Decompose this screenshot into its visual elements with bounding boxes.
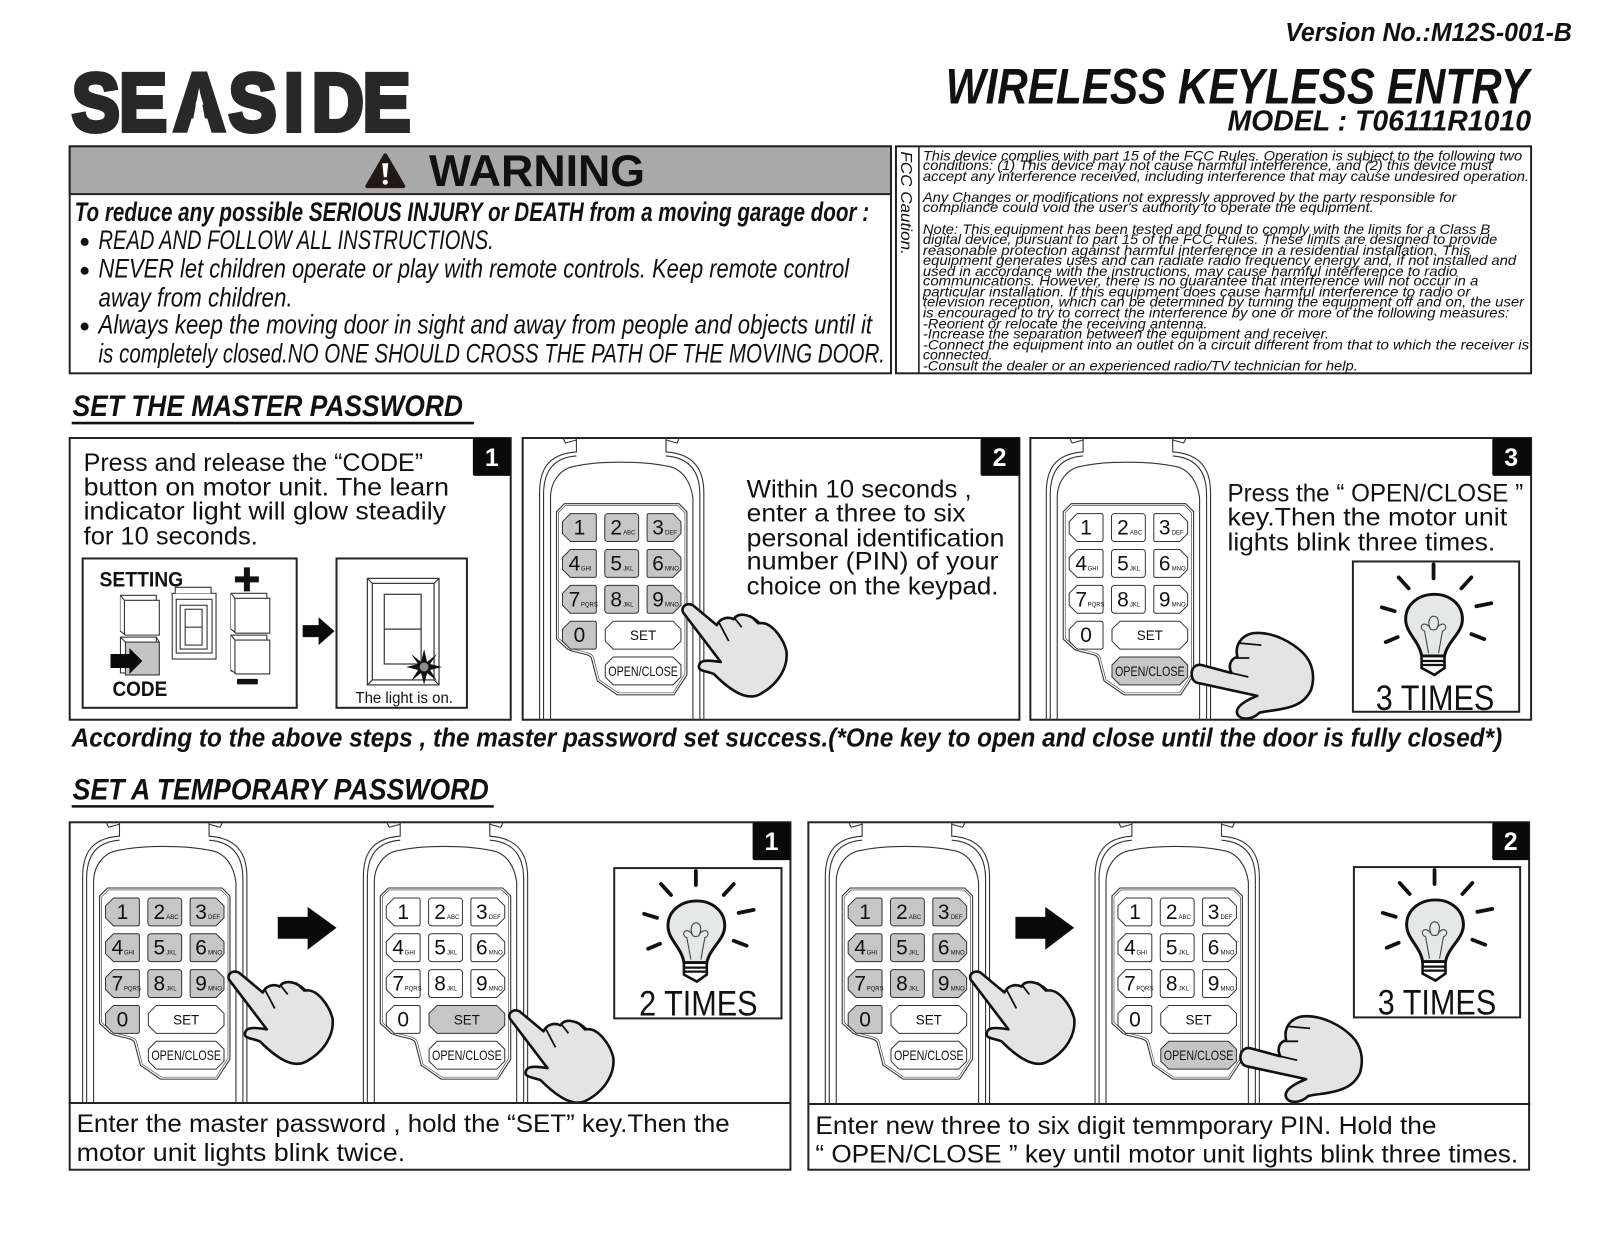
keypad remote: open/close key: OPEN/CLOSE [1164, 1048, 1233, 1063]
keypad remote: 8 [1117, 588, 1129, 611]
icon: hand pressing keypad [229, 972, 333, 1064]
keypad remote: digits: JKL [909, 987, 920, 993]
keypad remote: MNO [1172, 566, 1186, 572]
keypad remote: 1 [1080, 517, 1092, 540]
keypad remote: GHI [581, 566, 592, 572]
FCC text: conditions: (1) This device may not cause harmful interference, and (2) this device must [923, 158, 1494, 173]
indicator light diagram: The light is on. [355, 690, 453, 707]
keypad remote: open/close key: SET [1186, 1012, 1212, 1027]
keypad remote: MNO [665, 602, 679, 608]
keypad remote: 8 [610, 588, 622, 611]
FCC text: communications. However, there is no guarantee that interference will not occur in a [923, 274, 1478, 289]
step text [84, 449, 449, 551]
caption: temporary step 2: “ OPEN/CLOSE ” key until motor unit lights blink three times. [815, 1141, 1518, 1169]
keypad remote: digits: 2 [153, 901, 165, 924]
keypad remote: digits: 3 [938, 901, 950, 924]
step text [1227, 480, 1523, 557]
FCC text: particular installation. If this equipment does cause harmful interference to radio or [922, 285, 1471, 300]
keypad remote: digits [83, 822, 247, 1104]
keypad remote: digits: PQRS [124, 987, 141, 993]
keypad remote: JKL [623, 602, 634, 608]
keypad remote: digits: 6 [938, 937, 950, 960]
warning bullets: NEVER let children operate or play with remote controls. Keep remote control [99, 254, 850, 284]
keypad remote: PQRS [581, 602, 598, 608]
bulb callout: 2 times: 2 TIMES [639, 984, 758, 1023]
keypad remote: 5 [1117, 552, 1129, 575]
keypad remote: digits: JKL [909, 951, 920, 957]
step text: key.Then the motor unit [1227, 504, 1507, 532]
badge 2: 2 [993, 444, 1006, 472]
caption: temporary step 2 [808, 1104, 1529, 1170]
keypad remote: set key: 6 [476, 937, 488, 960]
keypad remote: digits: 5 [153, 937, 165, 960]
keypad remote: open/close key: 1 [1129, 901, 1141, 924]
caption: temporary step 2: Enter new three to six digit temmporary PIN. Hold the [815, 1112, 1437, 1140]
keypad remote: OPEN/CLOSE [1115, 664, 1185, 679]
FCC caution label: FCC Caution. [897, 151, 914, 255]
keypad remote: MNO [665, 566, 679, 572]
keypad remote: 2 [1117, 517, 1129, 540]
keypad remote: open/close key: 4 [1124, 937, 1136, 960]
keypad remote: open/close key: JKL [1179, 987, 1190, 993]
bulb callout: 3 times [1353, 561, 1519, 718]
keypad remote: digits: 7 [112, 973, 123, 996]
keypad remote: set key: 3 [476, 901, 488, 924]
keypad remote: 6 [1159, 552, 1171, 575]
keypad remote: JKL [623, 566, 634, 572]
step text: Press and release the “CODE” [84, 449, 423, 477]
keypad remote: set key: JKL [447, 951, 458, 957]
keypad remote: PQRS [1088, 602, 1105, 608]
keypad remote: digits: SET [916, 1012, 942, 1027]
FCC text: Any Changes or modifications not expressly approved by the party responsible for [922, 190, 1457, 205]
keypad remote: open/close key: PQRS [1136, 987, 1153, 993]
panel: master step 2 [523, 438, 1019, 720]
keypad remote: set key: 5 [434, 937, 446, 960]
keypad remote: digits: ABC [166, 915, 179, 921]
warning bullets: is completely closed.NO ONE SHOULD CROSS THE PATH OF THE MOVING DOOR. [99, 338, 885, 368]
keypad remote: digits: MNO [208, 987, 222, 993]
badge 3 [1492, 438, 1531, 476]
icon: hand pressing open/close [1192, 633, 1313, 719]
badge 2 [981, 438, 1019, 476]
badge 1 [473, 438, 511, 476]
FCC text: This device complies with part 15 of the FCC Rules. Operation is subject to the following two [923, 148, 1523, 163]
keypad remote: open/close key: MNO [1221, 951, 1235, 957]
FCC text: used in accordance with the instructions, may cause harmful interference to radio [923, 264, 1458, 279]
keypad remote: SET [1137, 628, 1163, 643]
keypad remote: digits: ABC [909, 915, 922, 921]
keypad remote: digits: 6 [195, 937, 207, 960]
step text: Within 10 seconds , [747, 475, 972, 503]
keypad remote: GHI [1088, 566, 1099, 572]
step text: personal identification [747, 525, 1004, 553]
keypad remote: JKL [1130, 566, 1141, 572]
keypad remote: open/close key: GHI [1136, 951, 1147, 957]
keypad remote: 3 [1159, 517, 1171, 540]
warning bullets: Always keep the moving door in sight and away from people and objects until it [97, 309, 873, 339]
keypad remote: set key: 7 [392, 973, 404, 996]
keypad remote [1046, 438, 1211, 720]
keypad remote: open/close key [1095, 822, 1259, 1104]
keypad remote: digits: 5 [896, 937, 908, 960]
motor unit buttons diagram [83, 558, 297, 708]
keypad remote: open/close key: 3 [1208, 901, 1219, 924]
step text: indicator light will glow steadily [84, 498, 447, 526]
FCC text: -Connect the equipment into an outlet on a circuit different from that to which the receiver is [923, 337, 1529, 352]
FCC text [922, 148, 1529, 373]
keypad remote: 9 [652, 588, 664, 611]
keypad remote: digits: 7 [854, 973, 866, 996]
warning intro: To reduce any possible SERIOUS INJURY or DEATH from a moving garage door : [75, 197, 869, 227]
warning bullets: away from children. [99, 283, 293, 313]
bulb callout: 3 times: 3 TIMES [1376, 679, 1494, 718]
keypad remote: 1 [574, 517, 585, 540]
caption: temporary step 1: motor unit lights blink twice. [77, 1139, 405, 1167]
badge 1: 1 [765, 828, 779, 856]
keypad remote: 0 [1080, 624, 1092, 647]
version number: Version No.:M12S-001-B [1285, 19, 1572, 47]
keypad remote: digits: JKL [166, 951, 177, 957]
keypad remote: digits: 2 [896, 901, 908, 924]
arrow [1015, 907, 1074, 950]
keypad remote: open/close key: 9 [1208, 973, 1219, 996]
step text: number (PIN) of your [747, 547, 999, 575]
keypad remote: ABC [1130, 531, 1143, 537]
keypad remote: digits: PQRS [867, 987, 884, 993]
keypad remote: DEF [1172, 531, 1184, 537]
step text: lights blink three times. [1227, 529, 1495, 557]
keypad remote: open/close key: ABC [1179, 915, 1192, 921]
caption: temporary step 1 [70, 1103, 790, 1170]
keypad remote: digits: JKL [166, 987, 177, 993]
icon: hand pressing set [509, 1010, 613, 1103]
badge 3: 3 [1504, 444, 1518, 472]
panel: master step 1 [70, 438, 511, 720]
keypad remote: digits: 1 [859, 901, 871, 924]
FCC text: digital device, pursuant to part 15 of the FCC Rules. These limits are designed to provide [923, 232, 1497, 247]
keypad remote: set key: 2 [434, 901, 446, 924]
step text: Press the “ OPEN/CLOSE ” [1227, 480, 1523, 508]
keypad remote: MNO [1172, 602, 1186, 608]
badge 2: 2 [1504, 828, 1518, 856]
keypad remote: digits: 8 [153, 973, 165, 996]
keypad remote: 5 [610, 552, 622, 575]
FCC text: television reception, which can be determined by turning the equipment off and on, the user [923, 295, 1525, 310]
keypad remote: digits: OPEN/CLOSE [151, 1048, 221, 1063]
keypad remote: digits: 1 [117, 901, 128, 924]
keypad remote: digits: MNO [208, 951, 222, 957]
keypad remote: digits: 9 [938, 973, 950, 996]
step text [747, 475, 1004, 600]
logo: SEASIDE: SEASIDE [72, 57, 411, 148]
model number: MODEL : T06111R1010 [1227, 105, 1531, 137]
keypad remote: JKL [1130, 602, 1141, 608]
keypad remote: digits: MNO [951, 951, 965, 957]
FCC text: accept any interference received, including interference that may cause undesired operation. [923, 169, 1529, 184]
FCC text: reasonable protection against harmful interference in a residential installation. This [923, 243, 1471, 258]
keypad remote: OPEN/CLOSE [608, 664, 678, 679]
motor unit buttons diagram: SETTING [100, 568, 183, 591]
icon: warning triangle [367, 155, 403, 186]
keypad remote: SET [630, 628, 656, 643]
panel: FCC caution [896, 146, 1531, 373]
keypad remote: open/close key: 8 [1166, 973, 1178, 996]
keypad remote: digits: DEF [208, 915, 220, 921]
keypad remote: 2 [610, 517, 622, 540]
motor unit buttons diagram: CODE [113, 678, 167, 701]
warning header bar [70, 146, 891, 194]
bulb callout: 2 times [614, 868, 781, 1023]
panel: temporary step 2 [808, 822, 1529, 1104]
step text: button on motor unit. The learn [84, 473, 449, 501]
badge 2 [1492, 822, 1529, 860]
keypad remote: 9 [1159, 588, 1171, 611]
keypad remote: open/close key: JKL [1179, 951, 1190, 957]
keypad remote: ABC [623, 531, 636, 537]
arrow [303, 617, 335, 645]
panel: warning [70, 146, 891, 373]
keypad remote: set key [363, 822, 528, 1104]
keypad remote: digits: DEF [951, 915, 963, 921]
keypad remote: set key: ABC [447, 915, 460, 921]
badge 1: 1 [485, 444, 499, 472]
success note: According to the above steps , the master password set success.(*One key to open and close until the door is fully closed*) [71, 725, 1502, 753]
heading: set the master password: SET THE MASTER PASSWORD [73, 390, 463, 423]
keypad remote: set key: 1 [397, 901, 409, 924]
panel: temporary step 1 [70, 822, 790, 1104]
keypad remote: set key: 4 [392, 937, 404, 960]
warning bullets [81, 225, 885, 368]
keypad remote: set key: DEF [489, 915, 501, 921]
keypad remote: digits: GHI [867, 951, 878, 957]
keypad remote: digits: OPEN/CLOSE [894, 1048, 964, 1063]
step text: enter a three to six [747, 500, 966, 528]
heading: set a temporary password: SET A TEMPORARY PASSWORD [73, 773, 489, 806]
keypad remote: set key: MNO [489, 951, 503, 957]
keypad remote: digits [825, 822, 990, 1104]
FCC text: -Reorient or relocate the receiving antenna. [923, 317, 1208, 332]
keypad remote: open/close key: 5 [1166, 937, 1178, 960]
keypad remote [540, 438, 704, 720]
keypad remote: set key: MNO [489, 987, 503, 993]
keypad remote: set key: GHI [405, 951, 416, 957]
FCC text: compliance could void the user's authority to operate the equipment. [923, 200, 1374, 215]
warning heading: WARNING [429, 146, 645, 196]
keypad remote: digits: 4 [854, 937, 866, 960]
keypad remote: digits: GHI [124, 951, 135, 957]
warning bullets: READ AND FOLLOW ALL INSTRUCTIONS. [99, 225, 494, 255]
bulb callout: 3 times [1354, 867, 1520, 1022]
panel: master step 3 [1030, 438, 1531, 720]
icon: hand pressing open/close [1240, 1016, 1362, 1102]
FCC text: is encouraged to try to correct the interference by one or more of the following measures: [923, 306, 1509, 321]
keypad remote: open/close key: 7 [1124, 973, 1136, 996]
step text: for 10 seconds. [84, 523, 258, 551]
keypad remote: open/close key: DEF [1221, 915, 1233, 921]
keypad remote: set key: 8 [434, 973, 446, 996]
keypad remote: open/close key: MNO [1221, 987, 1235, 993]
indicator light diagram [336, 558, 467, 708]
keypad remote: 7 [1075, 588, 1087, 611]
FCC text: -Consult the dealer or an experienced radio/TV technician for help. [923, 358, 1358, 373]
keypad remote: digits: SET [173, 1012, 199, 1027]
keypad remote: open/close key: 2 [1166, 901, 1178, 924]
keypad remote: 4 [1075, 552, 1087, 575]
keypad remote: digits: 8 [896, 973, 908, 996]
keypad remote: digits: 3 [195, 901, 207, 924]
FCC text: -Increase the separation between the equipment and receiver. [923, 326, 1329, 341]
caption: temporary step 1: Enter the master password , hold the “SET” key.Then the [77, 1110, 730, 1138]
keypad remote: digits: MNO [951, 987, 965, 993]
bulb callout: 3 times: 3 TIMES [1378, 983, 1496, 1022]
keypad remote: DEF [665, 531, 677, 537]
keypad remote: 7 [569, 588, 580, 611]
keypad remote: set key: PQRS [405, 987, 422, 993]
keypad remote: digits: 0 [859, 1008, 871, 1031]
keypad remote: open/close key: 6 [1208, 937, 1219, 960]
keypad remote: 6 [652, 552, 664, 575]
icon: hand pressing keypad [683, 604, 787, 696]
keypad remote: 4 [569, 552, 580, 575]
icon: hand pressing keypad [970, 972, 1074, 1064]
badge 1 [753, 822, 790, 860]
keypad remote: digits: 9 [195, 973, 207, 996]
keypad remote: set key: SET [454, 1012, 480, 1027]
keypad remote: set key: JKL [447, 987, 458, 993]
arrow [278, 907, 336, 950]
keypad remote: open/close key: 0 [1129, 1008, 1141, 1031]
keypad remote: set key: OPEN/CLOSE [432, 1048, 502, 1063]
FCC text: Note: This equipment has been tested and found to comply with the limits for a Class B [923, 222, 1490, 237]
keypad remote: set key: 0 [397, 1008, 409, 1031]
keypad remote: set key: 9 [476, 973, 488, 996]
FCC text: connected. [923, 347, 993, 362]
keypad remote: 3 [652, 517, 664, 540]
step text: choice on the keypad. [747, 572, 999, 600]
keypad remote: digits: 4 [112, 937, 123, 960]
keypad remote: 0 [574, 624, 585, 647]
keypad remote: digits: 0 [117, 1008, 128, 1031]
FCC text: equipment generates uses and can radiate radio frequency energy and, if not installed and [923, 253, 1517, 268]
